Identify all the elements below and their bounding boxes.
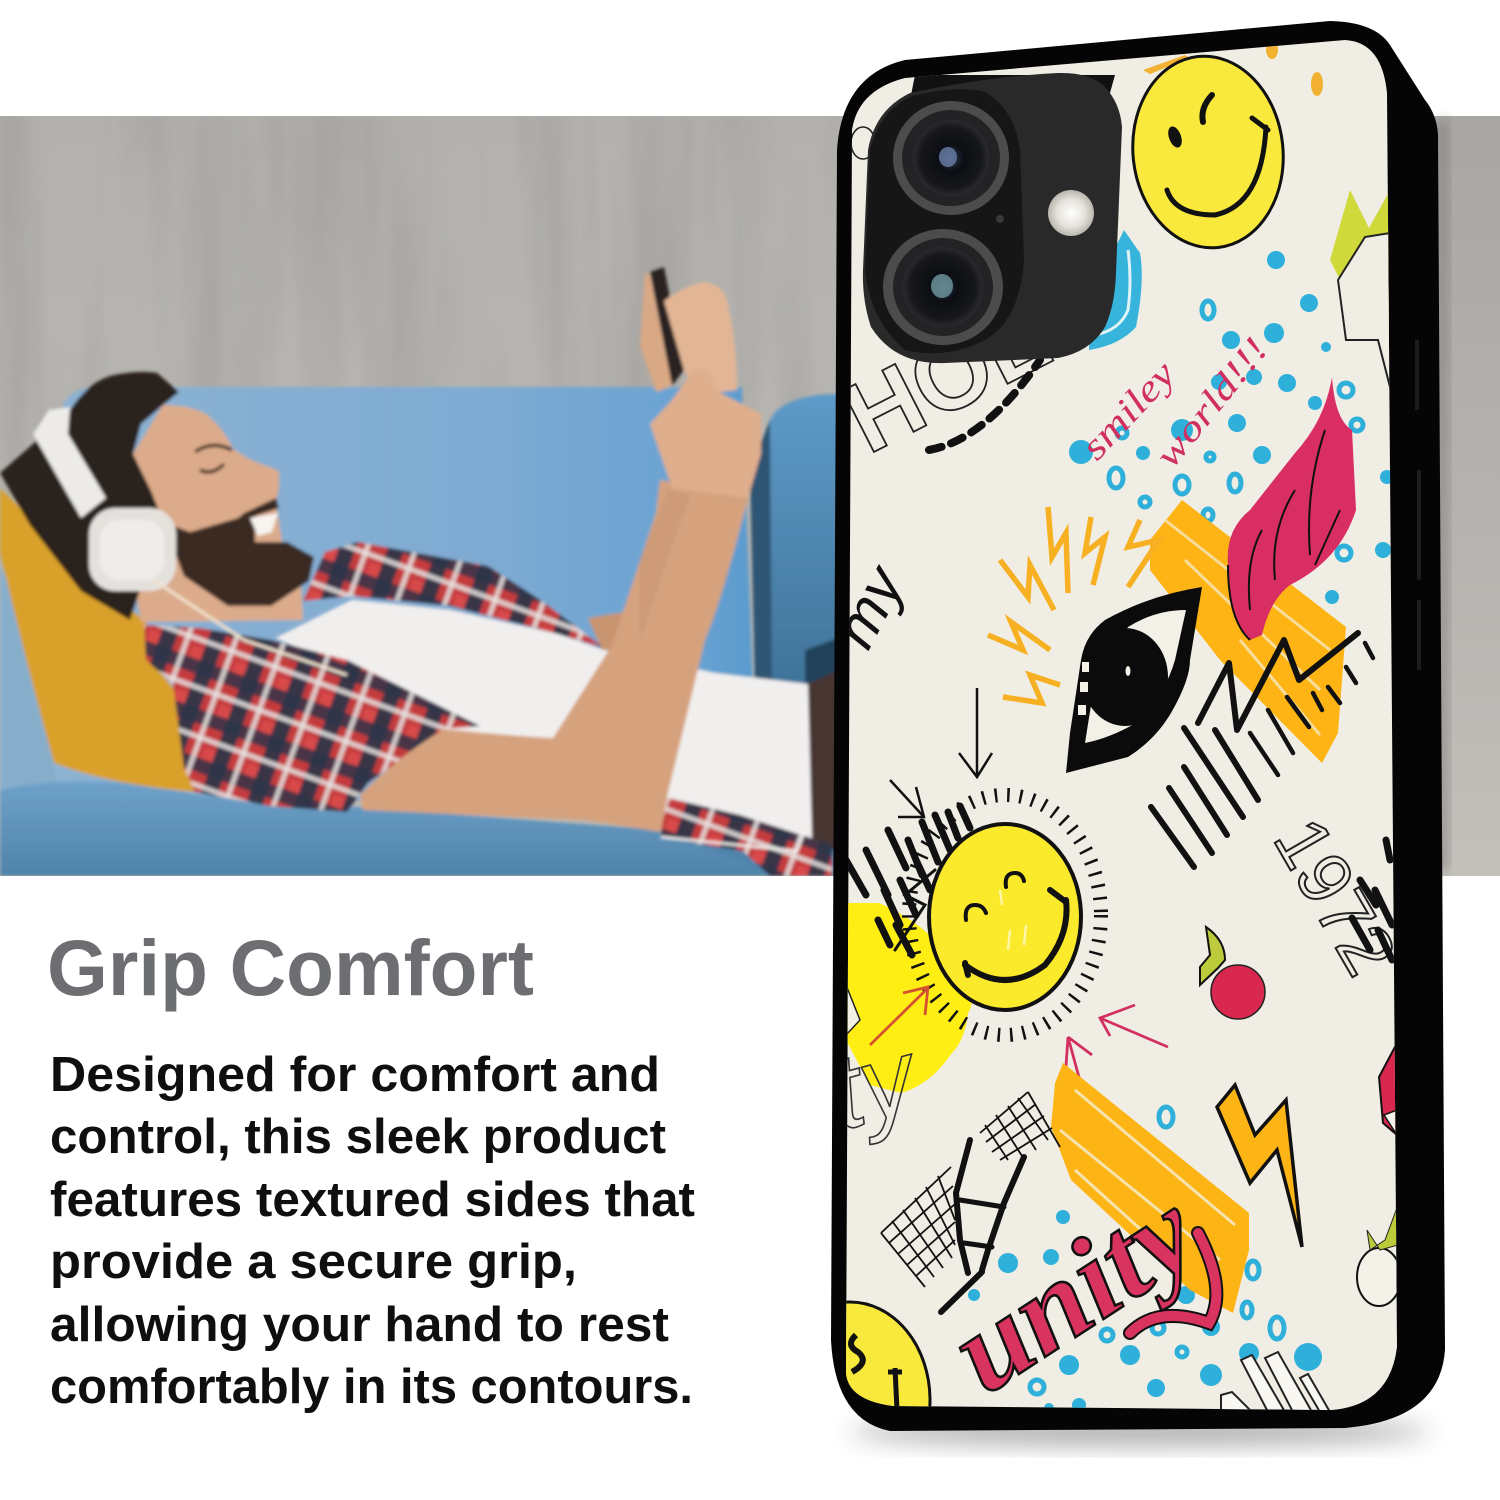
phone case [831, 21, 1445, 1458]
left "my" lettering: my [820, 552, 919, 658]
head [0, 372, 314, 622]
microphone dot [996, 215, 1004, 223]
pink wing [1228, 377, 1356, 640]
black case body [831, 21, 1445, 1431]
smiley world lettering [1088, 336, 1265, 464]
smile teeth [250, 513, 278, 536]
case shadow on wall strip [1436, 120, 1448, 870]
middle smiley [929, 824, 1081, 1010]
cherry [1200, 927, 1265, 1019]
top smiley [1131, 54, 1285, 250]
closed eye and brow [195, 445, 232, 472]
sofa seat and side cushion [0, 565, 780, 876]
far arm sliver [588, 612, 625, 650]
orange scribble lower [1051, 1063, 1249, 1313]
HOLD outline letters: HOLD [827, 246, 1130, 475]
down arrow [959, 688, 992, 777]
front arm [360, 480, 748, 832]
body text: allowing your hand to rest [50, 1298, 669, 1352]
orange flecks top [1143, 41, 1323, 96]
orange lightning bolts [988, 507, 1159, 703]
lime leaf [1330, 190, 1390, 340]
apple bottom right [1357, 1205, 1401, 1306]
plaid shirt [144, 542, 832, 876]
top lettering remnants [911, 75, 1115, 93]
lower lens [883, 229, 1003, 345]
flash [1048, 190, 1094, 236]
smiley world lettering: world!!! [1147, 329, 1276, 475]
cream printed back panel [846, 40, 1397, 1410]
marker pen [941, 1140, 1024, 1312]
upper lens [893, 101, 1009, 215]
heading: Grip Comfort [47, 923, 534, 1012]
body text: control, this sleek product [50, 1110, 666, 1164]
white patch on splash [846, 985, 860, 1035]
orange scribble behind eye [1150, 500, 1346, 763]
pink arrows [870, 987, 1168, 1125]
wall strip right of phone [1430, 116, 1500, 876]
crosshatch grids [881, 1092, 1060, 1287]
beard [163, 498, 314, 606]
sun rays [909, 795, 1101, 1035]
concrete wall [0, 116, 860, 876]
camera module [863, 73, 1122, 363]
black dashes over 1972 [1352, 840, 1392, 960]
faint outline word at left: ty [818, 1017, 932, 1152]
body text: features textured sides that [50, 1173, 695, 1227]
doodle artwork [846, 46, 1397, 1410]
sofa base behind legs [698, 838, 834, 876]
smiley world lettering: smiley [1073, 353, 1184, 468]
body text [50, 1048, 695, 1414]
outlined hand bottom right [1221, 1352, 1330, 1412]
1972 outline: 1972 [1258, 804, 1412, 989]
dark waistband [806, 670, 834, 852]
photo: man lying on sofa using phone [0, 116, 860, 876]
unity lettering: unity [928, 1165, 1219, 1418]
dark lens island [865, 89, 1024, 353]
black feather hatching [846, 806, 970, 955]
sofa armrest [748, 392, 836, 686]
small outline glyph [851, 127, 875, 159]
body text: Designed for comfort and [50, 1048, 660, 1102]
eye [1066, 587, 1202, 773]
back hair [0, 372, 179, 620]
headphones [33, 407, 808, 851]
phone in hand [650, 267, 684, 386]
bottom-left smiley [770, 1302, 930, 1498]
hands [640, 272, 761, 498]
yellow splash [846, 903, 972, 1093]
feather outline [1338, 233, 1390, 387]
body text: comfortably in its contours. [50, 1360, 693, 1414]
white t-shirt [276, 600, 812, 838]
case drop shadow [850, 1418, 1430, 1446]
body text: provide a secure grip, [50, 1235, 577, 1289]
blue scribble by camera [1089, 230, 1142, 350]
orange pillow [0, 488, 195, 792]
sofa back cushion [50, 387, 753, 800]
softened photo subject [0, 267, 860, 876]
arm shadow [640, 490, 690, 640]
side buttons [1415, 340, 1421, 670]
lightning outline [1217, 1085, 1302, 1247]
blue dots [968, 251, 1394, 1413]
second arrow [890, 780, 924, 817]
dashed curve [929, 360, 1040, 450]
red sneaker edge [1379, 1043, 1397, 1135]
zigzag and hatch strokes [1151, 633, 1373, 867]
